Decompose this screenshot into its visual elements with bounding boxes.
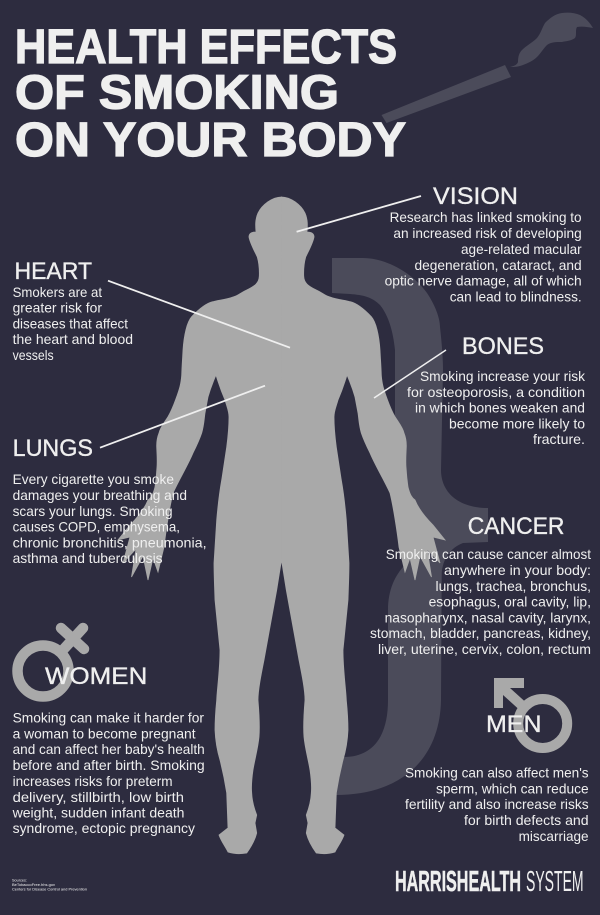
- section: men: miscarriage: [519, 828, 589, 844]
- section: women: syndrome, ectopic pregnancy: [13, 820, 195, 836]
- section: lungs: causes COPD, emphysema,: [13, 519, 180, 535]
- section: cancer: nasopharynx, nasal cavity, larynx,: [385, 610, 591, 626]
- section: vision: an increased risk of developing: [393, 225, 582, 241]
- section: heart: greater risk for: [13, 300, 102, 316]
- section: women: and can affect her baby's health: [13, 741, 205, 757]
- title: OF SMOKING: [15, 66, 339, 120]
- section: heart: the heart and blood: [13, 331, 133, 347]
- section: men: fertility and also increase risks: [405, 796, 589, 812]
- pointer line: bones: [374, 350, 446, 398]
- section: cancer: [370, 513, 591, 657]
- icon: female symbol: [18, 628, 84, 696]
- section: women: a woman to become pregnant: [13, 726, 196, 742]
- pointer line: heart: [108, 281, 290, 348]
- section: cancer: lungs, trachea, bronchus,: [436, 578, 591, 594]
- section: women: Smoking can make it harder for: [13, 710, 204, 726]
- section: lungs: damages your breathing and: [13, 487, 187, 503]
- section: cancer: liver, uterine, cervix, colon, rectum: [378, 641, 591, 657]
- section: vision: Research has linked smoking to: [390, 209, 582, 225]
- section: heart: Smokers are at: [13, 284, 102, 300]
- sources: BeTobaccoFree.hhs.gov: [12, 882, 55, 887]
- section: women: increases risks for preterm: [13, 773, 173, 789]
- section: men: Smoking can also affect men's: [405, 765, 589, 781]
- pointer line: lungs: [100, 386, 265, 448]
- title: ON YOUR BODY: [15, 114, 406, 167]
- section: vision: optic nerve damage, all of which: [385, 272, 582, 288]
- section: bones: BONES: [462, 333, 544, 360]
- sources: Centers for Disease Control and Prevention: [12, 886, 87, 892]
- section: men: MEN: [486, 711, 542, 738]
- section: lungs: LUNGS: [13, 435, 93, 462]
- section: lungs: scars your lungs. Smoking: [13, 503, 173, 519]
- section: bones: become more likely to: [449, 416, 585, 432]
- section: lungs: [13, 435, 207, 566]
- section: heart: HEART: [14, 258, 92, 285]
- title: HEALTH EFFECTS: [15, 21, 397, 74]
- section: men: sperm, which can reduce: [436, 780, 589, 796]
- section: men: [405, 711, 589, 844]
- section: vision: can lead to blindness.: [450, 288, 582, 304]
- section: women: delivery, stillbirth, low birth: [13, 789, 184, 805]
- section: cancer: Smoking can cause cancer almost: [386, 546, 591, 562]
- section: heart: vessels: [13, 347, 54, 363]
- section: heart: diseases that affect: [13, 316, 128, 332]
- section: cancer: CANCER: [468, 513, 564, 540]
- section: lungs: asthma and tuberculosis: [13, 550, 163, 566]
- title: [15, 21, 406, 167]
- section: vision: degeneration, cataract, and: [414, 257, 582, 273]
- ribbon shape behind body: [332, 258, 488, 795]
- section: lungs: chronic bronchitis, pneumonia,: [13, 534, 207, 550]
- section: bones: for osteoporosis, a condition: [407, 384, 585, 400]
- section: cancer: anywhere in your body:: [444, 562, 591, 578]
- pointer line: vision: [297, 196, 421, 232]
- section: women: before and after birth. Smoking: [13, 757, 205, 773]
- section: women: WOMEN: [45, 663, 147, 690]
- body silhouette: [118, 197, 445, 854]
- section: bones: fracture.: [533, 431, 585, 447]
- icon: male symbol: [494, 678, 567, 748]
- section: vision: VISION: [433, 183, 518, 210]
- section: bones: [407, 333, 586, 447]
- cigarette with smoke: [382, 13, 593, 123]
- section: vision: [385, 183, 582, 304]
- section: men: for birth defects and: [464, 812, 589, 828]
- sources: [12, 878, 87, 892]
- section: bones: in which bones weaken and: [415, 400, 585, 416]
- section: lungs: Every cigarette you smoke: [13, 471, 174, 487]
- section: cancer: stomach, bladder, pancreas, kidney,: [370, 625, 591, 641]
- section: vision: age-related macular: [461, 241, 582, 257]
- section: cancer: esophagus, oral cavity, lip,: [429, 594, 591, 610]
- sources: Sources:: [12, 878, 27, 882]
- section: bones: Smoking increase your risk: [420, 368, 586, 384]
- section: women: weight, sudden infant death: [12, 804, 184, 820]
- section: women: [12, 663, 205, 836]
- section: heart: [13, 258, 133, 363]
